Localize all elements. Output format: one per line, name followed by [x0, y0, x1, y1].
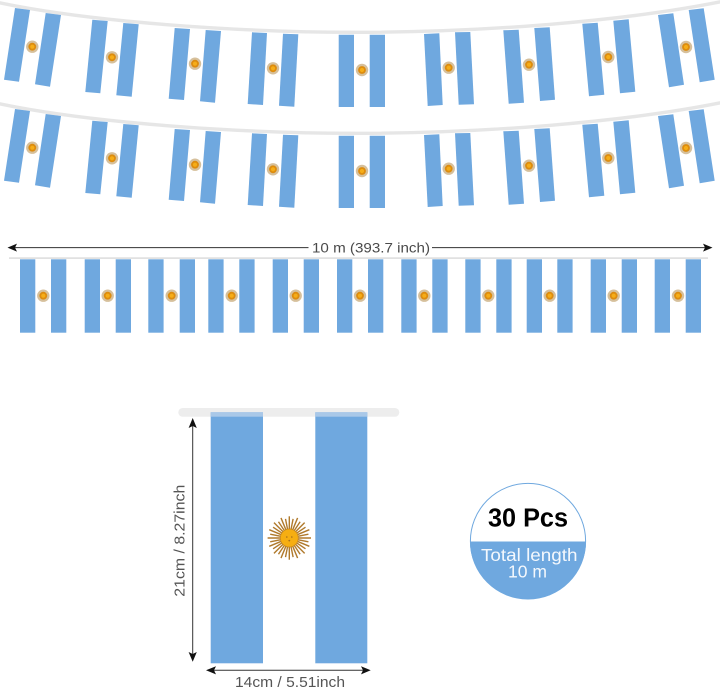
- flag 5: [339, 35, 385, 107]
- flag 9: [658, 109, 715, 188]
- straight bunting row: [9, 257, 708, 333]
- hanging tape: [178, 408, 399, 417]
- icon: sun of May: [268, 516, 311, 560]
- straight string: [9, 257, 708, 259]
- flag 11: [655, 259, 701, 333]
- flag 6: [424, 133, 474, 207]
- flag 3: [169, 129, 221, 204]
- flag 5: [339, 136, 385, 208]
- flag 2: [85, 259, 131, 333]
- height label: 21cm / 8.27inch: [172, 485, 188, 597]
- length label: 10 m (393.7 inch): [312, 240, 430, 256]
- width arrow: [206, 666, 371, 674]
- right arrow: [432, 244, 712, 252]
- flag 7: [401, 259, 448, 333]
- flag 5: [273, 259, 319, 333]
- flag 4: [208, 259, 255, 333]
- length dimension: 10 m: [8, 240, 712, 256]
- flag 2: [85, 121, 139, 198]
- badge lower fill: [470, 542, 586, 600]
- left arrow: [8, 244, 308, 252]
- bunting row 1: [0, 2, 720, 107]
- flag 4: [248, 32, 298, 107]
- bunting row 2: [0, 102, 720, 208]
- string 2: [0, 102, 720, 133]
- flag 7: [503, 27, 555, 104]
- flag 3: [169, 28, 221, 103]
- flag 9: [527, 259, 573, 333]
- left blue stripe: [211, 412, 263, 663]
- flag 9: [658, 8, 715, 87]
- flag 6: [337, 259, 383, 333]
- height arrow: [189, 418, 197, 662]
- quantity: 30 Pcs: [488, 504, 568, 532]
- string 1: [0, 2, 720, 32]
- flag 1: [4, 8, 61, 87]
- flag 8: [582, 19, 635, 96]
- flag 2: [85, 20, 139, 97]
- flag 10: [591, 259, 637, 333]
- flag 8: [582, 120, 635, 197]
- flag 1: [20, 259, 66, 333]
- flag 1: [4, 109, 61, 188]
- total length value: 10 m: [508, 562, 547, 582]
- flag 7: [503, 128, 555, 205]
- badge: quantity and total length: [470, 483, 586, 600]
- flag 8: [465, 259, 512, 333]
- badge outline: [470, 483, 586, 599]
- flag 4: [248, 133, 298, 208]
- flag 6: [424, 32, 474, 106]
- right blue stripe: [315, 412, 367, 663]
- total length label: Total length: [481, 545, 578, 565]
- flag 3: [148, 259, 195, 333]
- large flag detail: [172, 408, 399, 690]
